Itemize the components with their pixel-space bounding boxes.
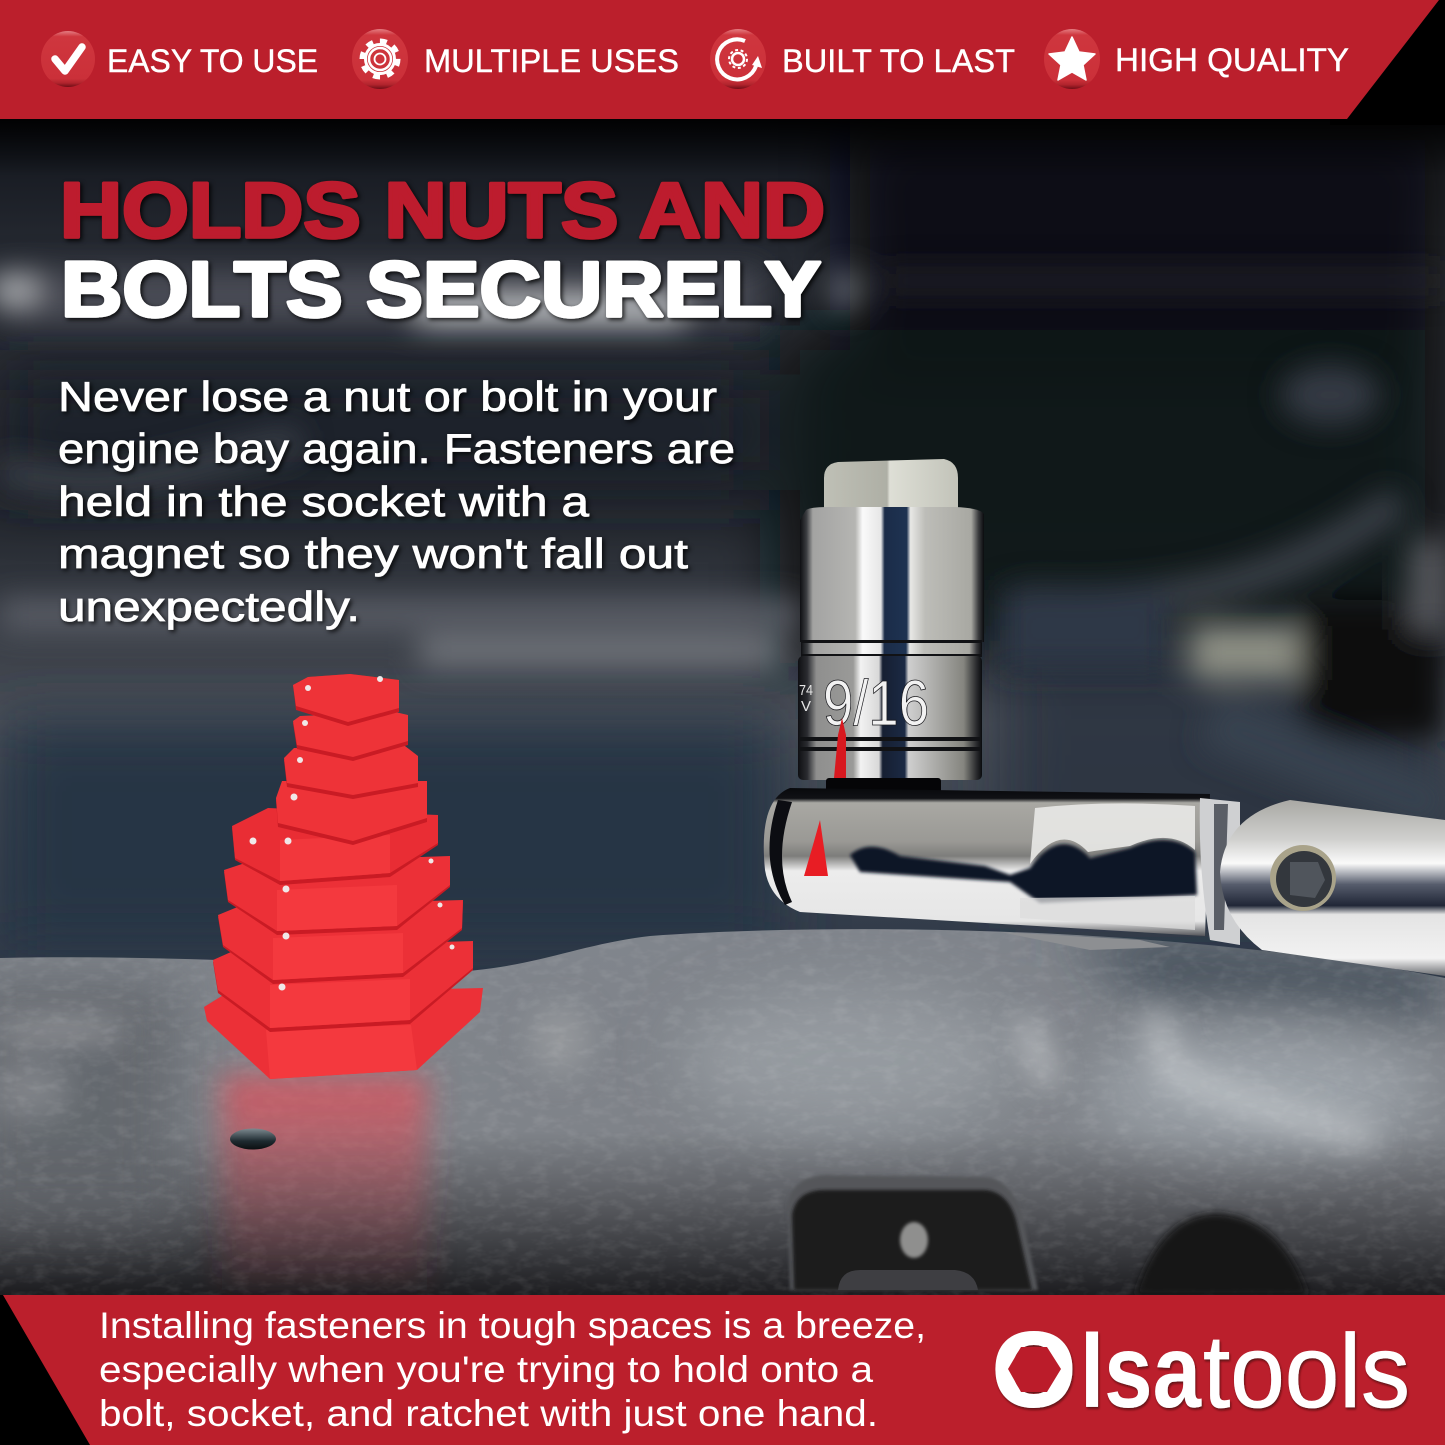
body text: Never lose a nut or bolt in your	[58, 373, 717, 420]
magnet dots	[250, 676, 454, 990]
socket with nut on ratchet	[764, 459, 1445, 976]
heading: HOLDS NUTS AND	[60, 166, 825, 254]
pebble	[230, 1128, 276, 1150]
badge: high quality	[1044, 29, 1349, 89]
layer 3	[284, 746, 418, 799]
red hex nut holder stack	[204, 674, 483, 1079]
logo: Olsatools: O	[992, 1311, 1076, 1429]
layer 1	[293, 674, 399, 726]
top banner	[0, 0, 1439, 119]
logo: Olsatools: lsa	[1080, 1314, 1202, 1430]
body text: unexpectedly.	[58, 583, 360, 630]
badge: multiple uses	[352, 29, 679, 89]
red reflection on ratchet	[804, 820, 828, 876]
heading: BOLTS SECURELY	[61, 245, 821, 333]
ratchet joint	[1200, 798, 1240, 945]
body text: held in the socket with a	[58, 478, 590, 525]
badge: built to last: BUILT TO LAST	[782, 43, 1015, 79]
layer 5	[232, 808, 438, 885]
socket with nut on ratchet: V	[801, 698, 811, 715]
top vignette	[0, 115, 1445, 175]
layer 2	[293, 712, 408, 761]
badge: easy to use: EASY TO USE	[107, 43, 318, 79]
layer 9	[204, 988, 483, 1079]
layer 4	[276, 781, 427, 845]
icon: star	[1044, 29, 1100, 89]
bracket in metal	[788, 1175, 1038, 1290]
badge: multiple uses: MULTIPLE USES	[424, 43, 679, 79]
badge: easy to use	[41, 31, 318, 87]
layer 8	[213, 941, 473, 1032]
dark hole in metal	[1135, 1213, 1308, 1295]
body text: magnet so they won't fall out	[58, 530, 688, 577]
icon: check	[41, 31, 95, 87]
socket lower body	[798, 656, 982, 780]
ratchet handle	[1220, 800, 1445, 976]
logo: Olsatools: tools	[1203, 1314, 1410, 1430]
layer 6	[224, 856, 450, 935]
body text	[58, 373, 735, 630]
icon: circular arrow	[710, 29, 766, 89]
ratchet head	[764, 788, 1210, 936]
bottom text: especially when you're trying to hold onto a	[99, 1349, 873, 1390]
badge: high quality: HIGH QUALITY	[1115, 42, 1349, 78]
socket with nut on ratchet: 74	[799, 682, 813, 699]
bottom text: Installing fasteners in tough spaces is a breeze,	[99, 1305, 926, 1346]
red reflection on socket	[834, 718, 846, 778]
red reflection	[222, 1075, 427, 1290]
bottom text: bolt, socket, and ratchet with just one hand.	[99, 1393, 878, 1434]
bottom banner	[3, 1295, 1445, 1445]
logo: Olsatools	[992, 1311, 1410, 1430]
bottom text	[99, 1305, 926, 1434]
socket upper body	[800, 507, 984, 642]
engine metal surface	[0, 925, 1445, 1300]
icon: gear	[352, 29, 408, 89]
nut in socket	[824, 459, 958, 510]
badge: built to last	[710, 29, 1015, 89]
handle bolt	[1270, 845, 1336, 911]
heading	[60, 166, 825, 333]
socket size marking: 9/16	[823, 667, 929, 739]
socket collar	[801, 640, 982, 656]
body text: engine bay again. Fasteners are	[58, 425, 735, 472]
layer 7	[218, 900, 463, 984]
